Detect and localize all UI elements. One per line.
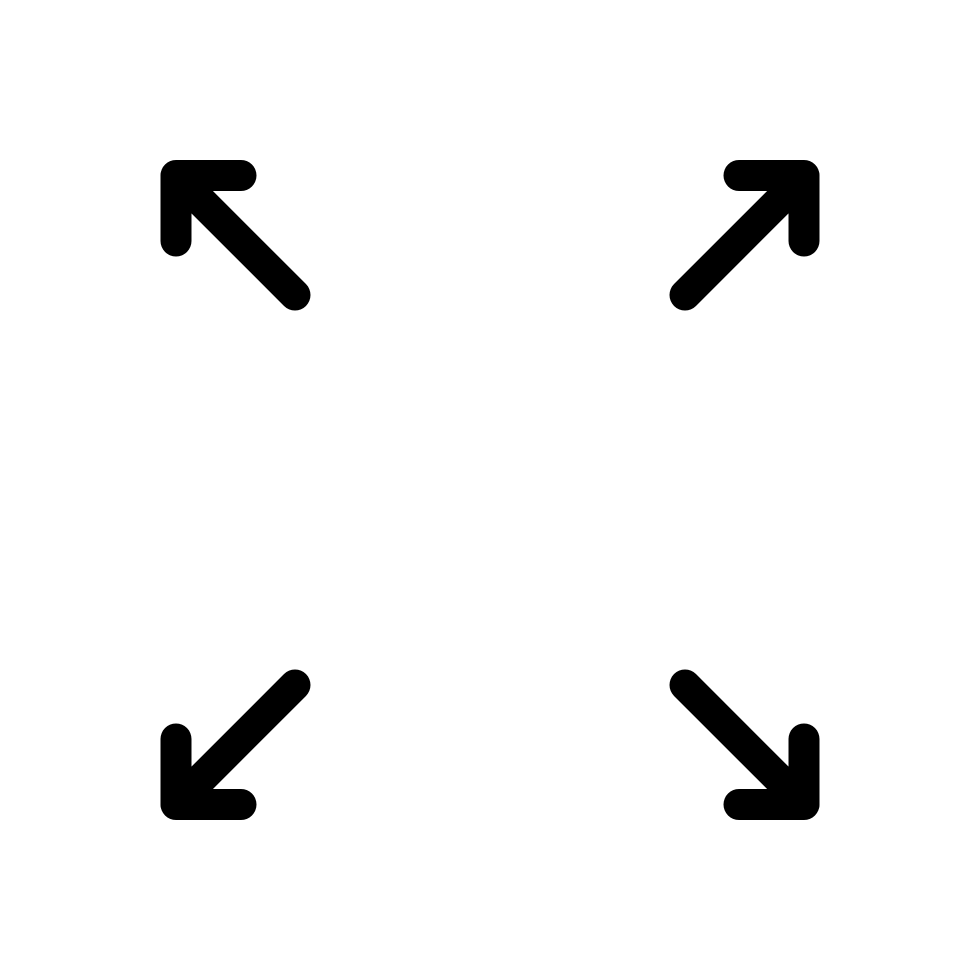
arrow: top left — [176, 176, 295, 295]
arrow: bottom right — [685, 685, 804, 804]
arrow: top right — [685, 176, 804, 295]
arrow: bottom left — [176, 685, 295, 804]
